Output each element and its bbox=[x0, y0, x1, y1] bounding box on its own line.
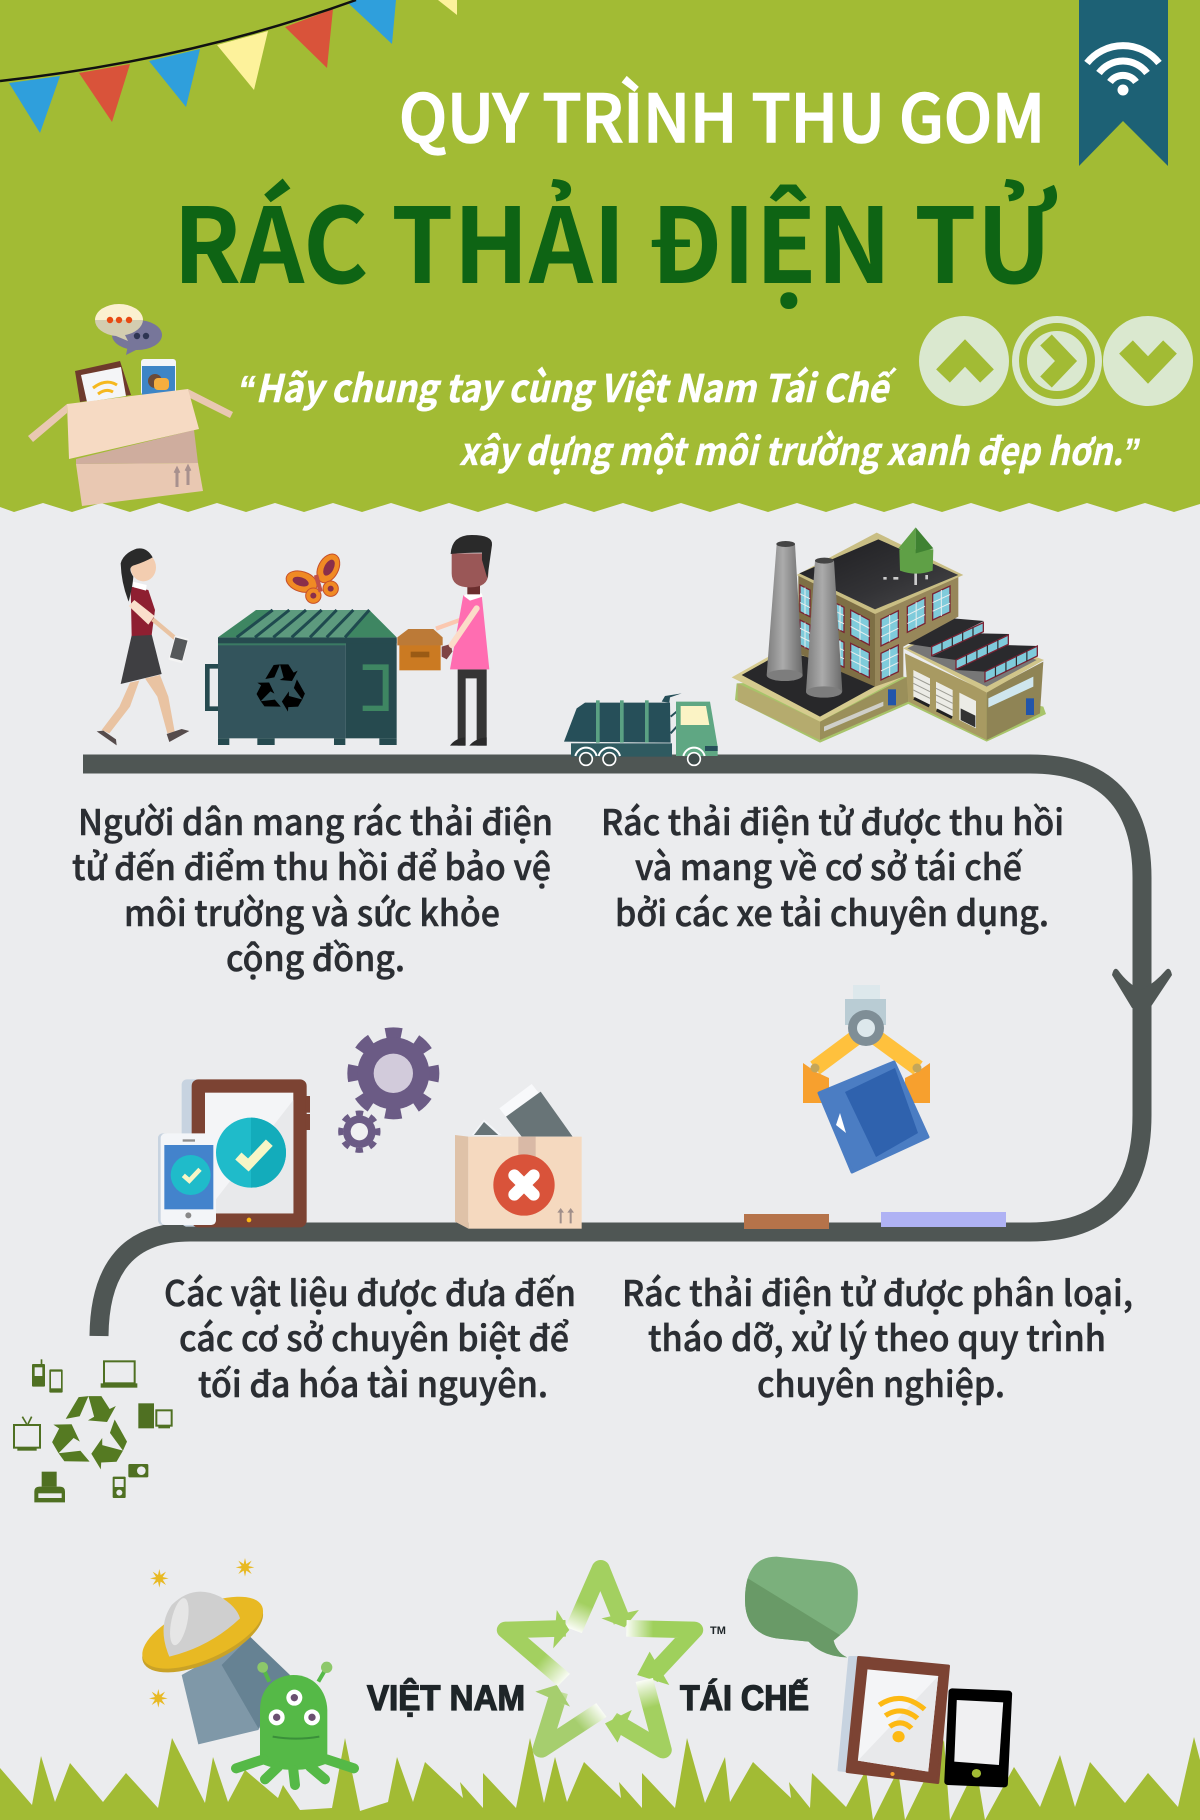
text: step 4 bbox=[622, 1266, 1133, 1408]
icon: green alien bbox=[236, 1662, 354, 1785]
text: step 2: và mang về cơ sở tái chế bbox=[635, 840, 1023, 891]
text: step 2: bởi các xe tải chuyên dụng. bbox=[615, 886, 1049, 937]
icon: bunting flags bbox=[0, 0, 457, 133]
icon: devices and gears bbox=[158, 1033, 434, 1227]
title line 2: RÁC THẢI ĐIỆN TỬ bbox=[173, 162, 1057, 313]
text: step 3 bbox=[164, 1266, 576, 1408]
text: step 2: Rác thải điện tử được thu hồi bbox=[601, 795, 1064, 846]
icon: three arrow circles bbox=[919, 316, 1193, 406]
icon: rejected box with phones bbox=[455, 1084, 582, 1229]
text: step 1: cộng đồng. bbox=[226, 931, 405, 982]
logo text right: TÁI CHẾ bbox=[680, 1678, 809, 1718]
title line 1: QUY TRÌNH THU GOM bbox=[399, 66, 1045, 162]
icon: recycling arrows bbox=[45, 1396, 134, 1474]
icon: television bbox=[14, 1417, 40, 1451]
icon: wifi ribbon bbox=[1079, 0, 1168, 166]
icon: lavender conveyor slab bbox=[881, 1212, 1006, 1227]
icon: camera bbox=[128, 1464, 148, 1477]
icon: woman bbox=[97, 548, 189, 745]
panel: green header bbox=[0, 0, 1200, 512]
icon: printer bbox=[34, 1472, 65, 1502]
text: step 4: Rác thải điện tử được phân loại, bbox=[622, 1266, 1133, 1317]
text: step 1 bbox=[72, 795, 553, 982]
text: step 1: tử đến điểm thu hồi để bảo vệ bbox=[72, 840, 551, 891]
text: step 4: chuyên nghiệp. bbox=[757, 1357, 1005, 1408]
icon: large gear bbox=[353, 1033, 434, 1114]
arrow: process path bbox=[83, 764, 1172, 1336]
icon: speech bubble bbox=[745, 1556, 858, 1658]
quote bbox=[238, 358, 1140, 476]
icon: recycling star bbox=[506, 1568, 694, 1750]
icon: man with box bbox=[397, 535, 492, 746]
text: step 1: môi trường và sức khỏe bbox=[124, 886, 500, 937]
icon: dumpster bbox=[207, 610, 397, 745]
icon: phone with check bbox=[158, 1133, 216, 1225]
icon: recycling factory bbox=[732, 527, 1046, 743]
icon: tablet with wifi bbox=[839, 1657, 949, 1783]
icon: black phone bbox=[948, 1692, 1009, 1784]
icon: tablet with check bbox=[182, 1079, 310, 1227]
icon: UFO bbox=[132, 1558, 290, 1744]
icon: garbage truck bbox=[564, 693, 718, 765]
text: step 3: các cơ sở chuyên biệt để bbox=[179, 1311, 569, 1362]
quote: “Hãy chung tay cùng Việt Nam Tái Chế bbox=[238, 358, 897, 413]
text: step 4: tháo dỡ, xử lý theo quy trình bbox=[648, 1311, 1106, 1362]
logo text left: VIỆT NAM bbox=[367, 1678, 525, 1718]
icon: recycling symbol bbox=[252, 664, 310, 715]
logo: Việt Nam Tái Chế bbox=[367, 1568, 809, 1750]
icon: robot claw with tablet bbox=[803, 985, 930, 1172]
text: step 2 bbox=[601, 795, 1064, 937]
grass bbox=[0, 1737, 1200, 1820]
icon: brown conveyor slab bbox=[744, 1214, 829, 1229]
quote: xây dựng một môi trường xanh đẹp hơn.” bbox=[459, 421, 1140, 476]
icon: music player bbox=[113, 1477, 126, 1498]
trademark: TM bbox=[710, 1625, 726, 1637]
text: step 3: Các vật liệu được đưa đến bbox=[164, 1266, 576, 1317]
icon: open box with devices bbox=[28, 304, 233, 506]
icon: laptop bbox=[101, 1361, 137, 1388]
icon: cell phones bbox=[32, 1359, 63, 1393]
icon: desktop computer bbox=[138, 1403, 172, 1428]
icon: butterfly bbox=[283, 550, 344, 603]
text: step 3: tối đa hóa tài nguyên. bbox=[198, 1357, 548, 1408]
icon: recycling with electronics bbox=[14, 1359, 172, 1502]
text: step 1: Người dân mang rác thải điện bbox=[78, 795, 553, 846]
icon: small gear bbox=[341, 1113, 378, 1150]
icon: woman, dumpster, man bbox=[97, 535, 492, 746]
